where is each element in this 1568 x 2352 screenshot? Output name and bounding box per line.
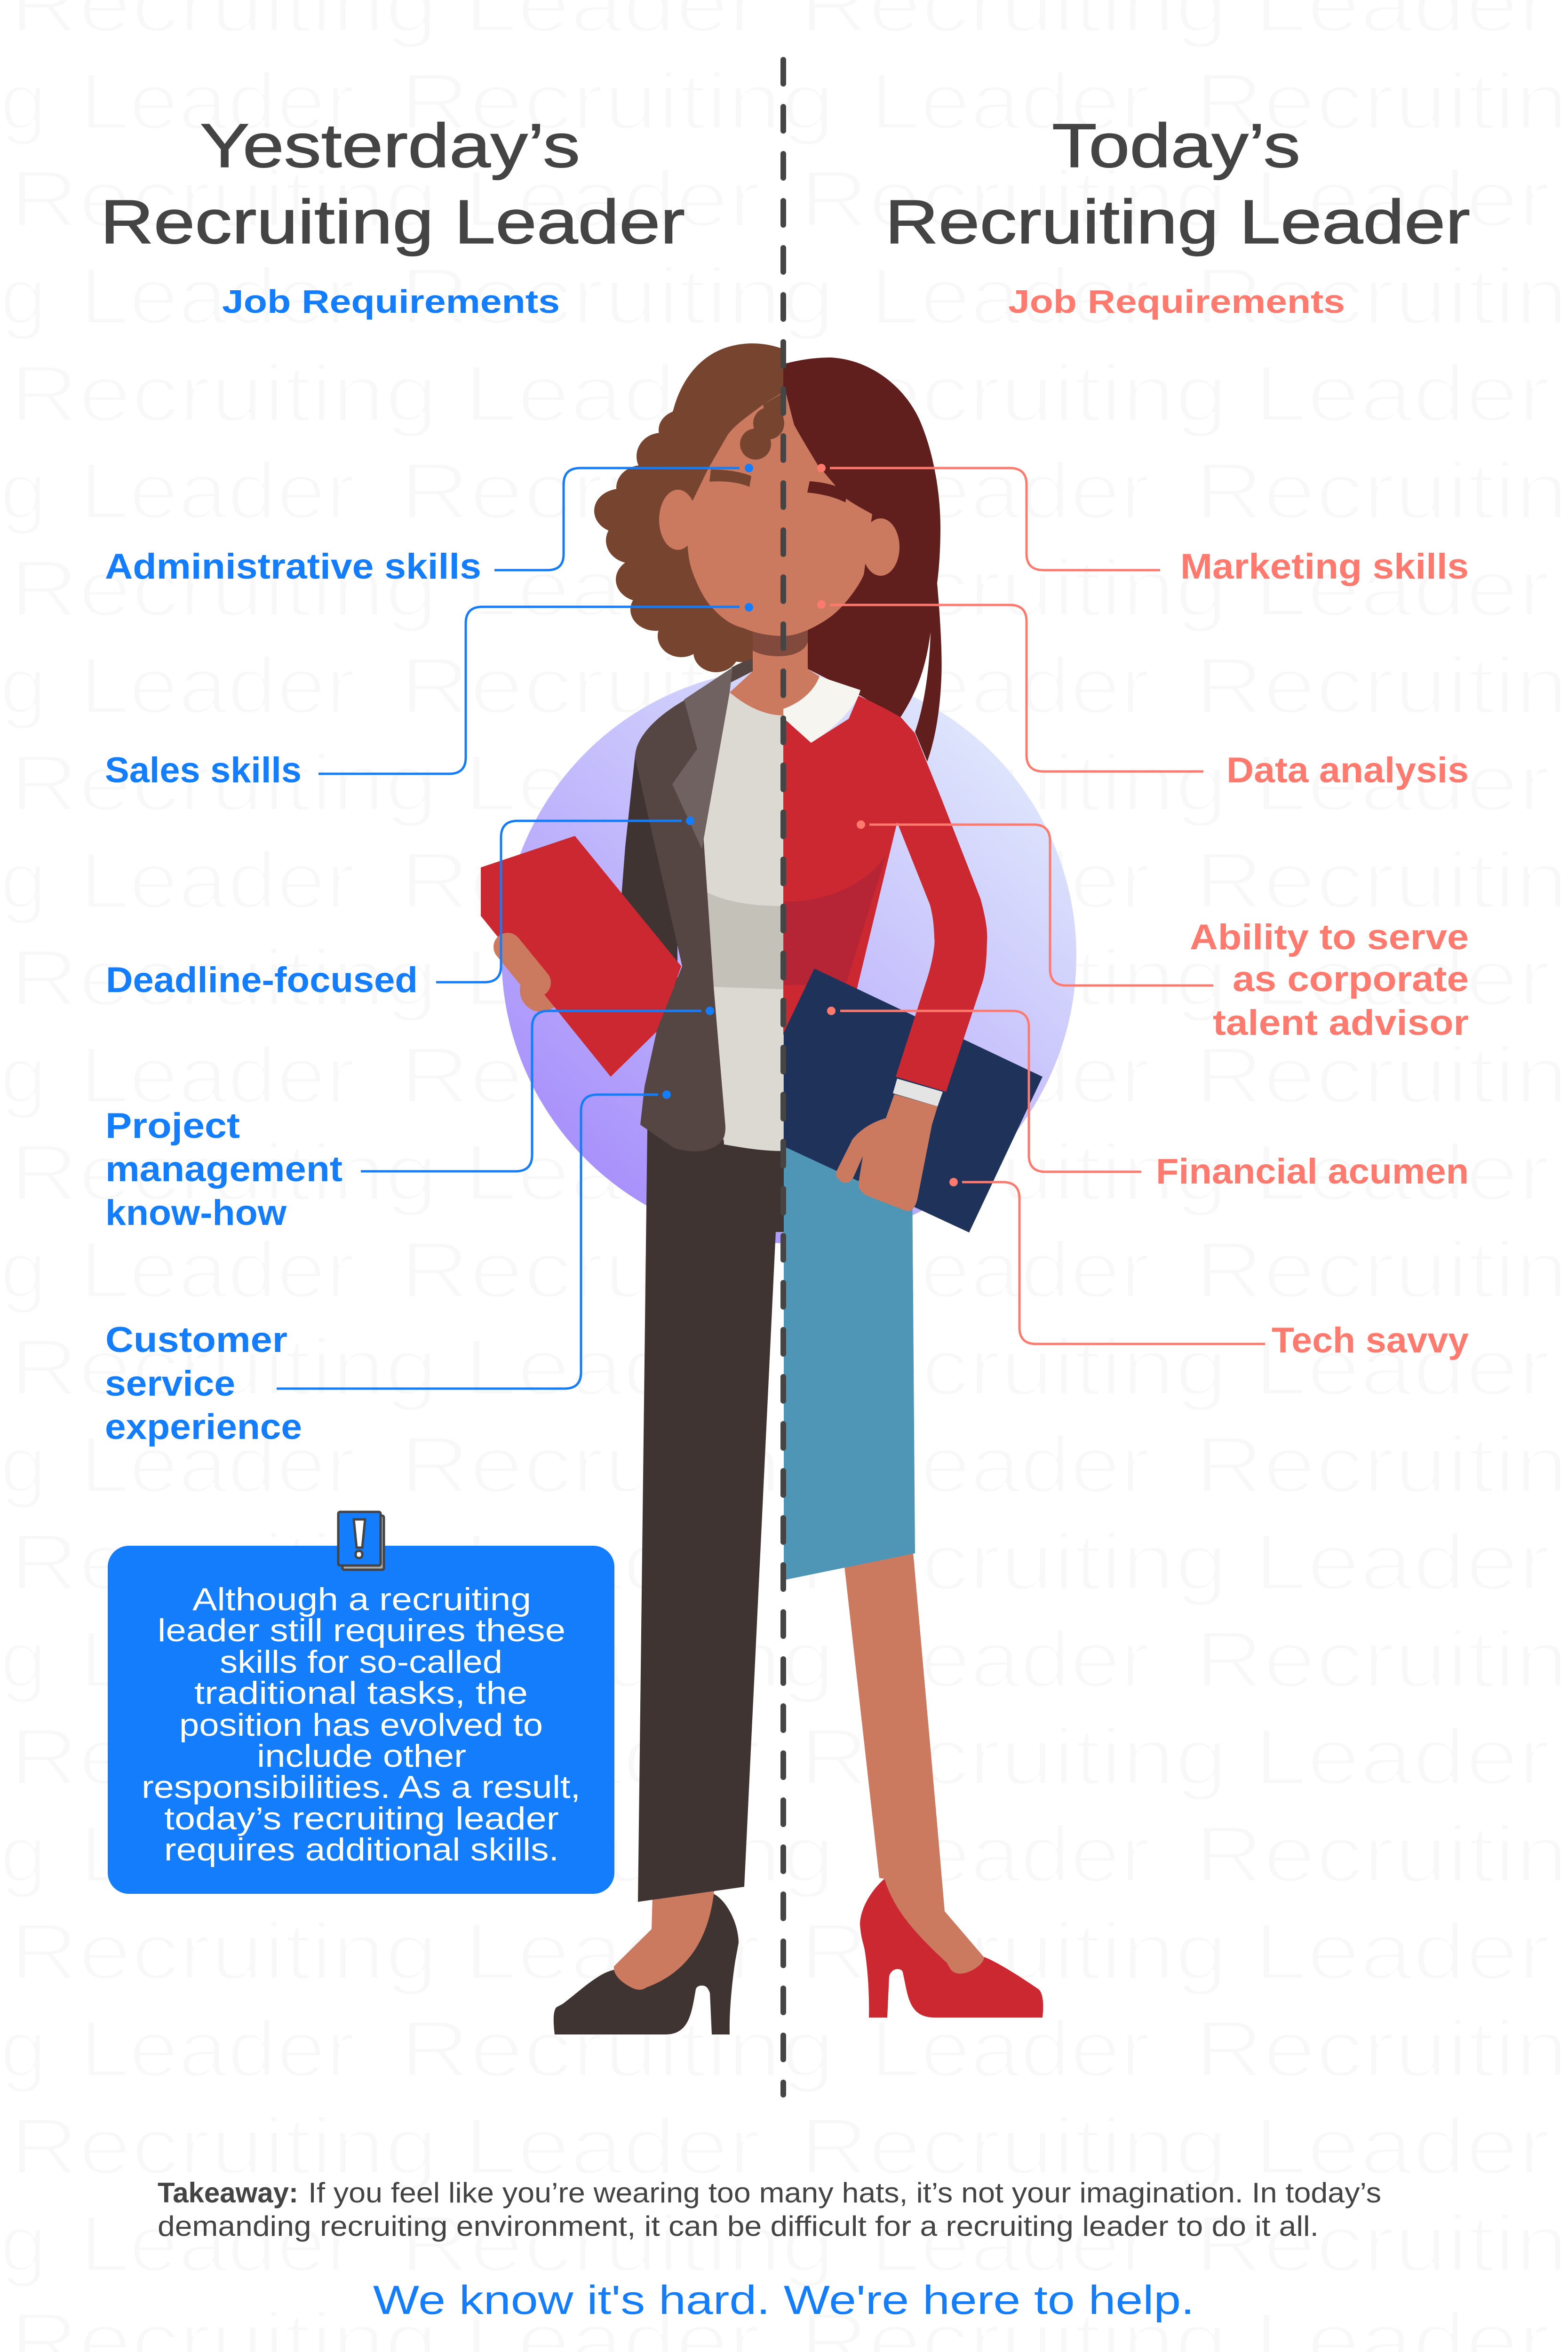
background watermark: repeating Recruiting Leader: Recruiting <box>400 1031 835 1120</box>
background watermark: repeating Recruiting Leader: g <box>0 2199 47 2288</box>
background watermark: repeating Recruiting Leader: Leader <box>80 1031 355 1120</box>
connector: Data analysis <box>817 600 1203 771</box>
label: Ability to serve as corporate talent advisor: talent advisor <box>1213 1003 1469 1043</box>
right hand <box>836 1094 938 1211</box>
jacket <box>635 682 725 1152</box>
background watermark: repeating Recruiting Leader: Leader <box>80 2004 355 2094</box>
left leg <box>614 1886 715 1990</box>
background watermark: repeating Recruiting Leader: Leader <box>80 1810 355 1899</box>
heading: Yesterday's Recruiting Leader: Yesterday’s <box>200 111 580 180</box>
callout text: Although a recruiting <box>192 1581 531 1617</box>
background watermark: repeating Recruiting Leader: g <box>0 446 47 536</box>
connector: Deadline-focused <box>436 817 694 982</box>
background watermark: repeating Recruiting Leader: Recruiting Leader <box>10 1907 760 1996</box>
background watermark: repeating Recruiting Leader: g <box>0 1810 47 1899</box>
label: Customer service experience: Customer <box>105 1320 287 1360</box>
left ear <box>659 490 697 550</box>
neck shadow <box>753 630 808 656</box>
background watermark: repeating Recruiting Leader: Recruitin <box>1195 446 1568 536</box>
label: Financial acumen: Financial acumen <box>1156 1152 1469 1192</box>
callout text: responsibilities. As a result, <box>142 1769 581 1805</box>
background watermark: repeating Recruiting Leader: Recruiting Leader <box>10 1128 760 1217</box>
background watermark: repeating Recruiting Leader: Recruiting Leader <box>10 349 760 438</box>
background watermark: repeating Recruiting Leader: Recruiting Leader <box>800 1323 1550 1412</box>
callout text: skills for so-called <box>220 1644 502 1680</box>
background watermark: repeating Recruiting Leader: Recruitin <box>1195 1420 1568 1510</box>
background watermark: repeating Recruiting Leader: Recruitin <box>1195 57 1568 146</box>
heading: Today's Recruiting Leader: Today’s <box>1052 111 1300 180</box>
background watermark: repeating Recruiting Leader: Recruiting Leader <box>800 544 1550 633</box>
background watermark: repeating Recruiting Leader: Leader <box>870 1615 1150 1704</box>
label: Data analysis: Data analysis <box>1226 750 1469 790</box>
callout text: requires additional skills. <box>164 1832 559 1867</box>
forehead curls <box>740 393 784 460</box>
label: Project management know-how <box>105 1106 342 1233</box>
background watermark: repeating Recruiting Leader: g <box>0 57 47 146</box>
background watermark: repeating Recruiting Leader: Recruiting <box>400 252 835 341</box>
takeaway text: Takeaway: <box>158 2177 298 2209</box>
left eyebrow <box>709 469 751 487</box>
connector: Marketing skills <box>817 464 1160 570</box>
jacket lapel <box>672 667 732 849</box>
trousers <box>638 1129 784 1902</box>
background watermark: repeating Recruiting Leader: Recruitin <box>1195 2199 1568 2288</box>
background watermark: repeating Recruiting Leader: g <box>0 1225 47 1315</box>
background watermark: repeating Recruiting Leader: Recruiting Leader <box>10 1712 760 1802</box>
background watermark: repeating Recruiting Leader: Leader <box>80 1615 355 1704</box>
skirt <box>784 1129 915 1580</box>
background watermark: repeating Recruiting Leader: Recruiting <box>400 2199 835 2288</box>
left shoe <box>554 1894 739 2034</box>
background circle <box>501 668 1076 1243</box>
takeaway text: demanding recruiting environment, it can be difficult for a recruiting leader to do it all. <box>158 2210 1319 2242</box>
sweater torso <box>783 696 936 1035</box>
background watermark: repeating Recruiting Leader: Recruitin <box>1195 836 1568 925</box>
background watermark: repeating Recruiting Leader: g <box>0 1615 47 1704</box>
background watermark: repeating Recruiting Leader: Leader <box>80 1225 355 1315</box>
background watermark: repeating Recruiting Leader: Leader <box>870 446 1150 536</box>
takeaway text <box>158 2177 1381 2242</box>
background watermark: repeating Recruiting Leader: g <box>0 1420 47 1510</box>
label: Project management know-how: Project <box>105 1106 240 1146</box>
background watermark: repeating Recruiting Leader: Recruitin <box>1195 1225 1568 1315</box>
jacket inner shadow <box>616 755 677 988</box>
background watermark: repeating Recruiting Leader: Leader <box>80 57 355 146</box>
background watermark: repeating Recruiting Leader: Recruiting <box>400 641 835 731</box>
background watermark: repeating Recruiting Leader: Recruiting Leader <box>10 544 760 633</box>
background watermark: repeating Recruiting Leader: Recruiting Leader <box>10 739 760 828</box>
background watermark: repeating Recruiting Leader: Recruiting <box>400 1615 835 1704</box>
right ear <box>862 518 899 576</box>
illustration: split figure of recruiting leader <box>481 343 1043 2034</box>
background watermark: repeating Recruiting Leader: Leader <box>80 446 355 536</box>
call to action: We know it's hard. We're here to help. <box>373 2278 1194 2323</box>
blue folder <box>784 969 1043 1232</box>
left hair <box>594 343 783 672</box>
left hand finger <box>508 947 537 983</box>
callout text: today’s recruiting leader <box>164 1801 559 1836</box>
background watermark: repeating Recruiting Leader: Recruiting <box>400 57 835 146</box>
background watermark: repeating Recruiting Leader: Leader <box>870 252 1150 341</box>
jacket back collar <box>730 659 753 683</box>
background watermark: repeating Recruiting Leader: Leader <box>870 641 1150 731</box>
neck and chest <box>730 626 820 715</box>
background watermark: repeating Recruiting Leader: Leader <box>80 641 355 731</box>
background watermark: repeating Recruiting Leader: Leader <box>870 2004 1150 2094</box>
background watermark: repeating Recruiting Leader: Leader <box>80 2199 355 2288</box>
sweater arm <box>896 733 987 1092</box>
sweater collar <box>783 676 860 743</box>
callout text <box>142 1581 581 1867</box>
sweater cuff <box>893 1079 943 1106</box>
top shadow band <box>704 890 783 989</box>
background watermark: repeating Recruiting Leader: Recruiting Leader <box>800 2102 1550 2191</box>
subheading: right job requirements: Job Requirements <box>1008 283 1345 320</box>
background watermark: repeating Recruiting Leader: Recruitin <box>1195 641 1568 731</box>
heading: Today's Recruiting Leader <box>885 111 1470 256</box>
label: Sales skills: Sales skills <box>105 750 302 790</box>
label: Ability to serve as corporate talent advisor: Ability to serve <box>1190 917 1469 957</box>
background watermark: repeating Recruiting Leader: Recruiting <box>400 1810 835 1899</box>
label: Administrative skills: Administrative skills <box>105 547 481 587</box>
background watermark: repeating Recruiting Leader: Leader <box>80 252 355 341</box>
background watermark: repeating Recruiting Leader: Leader <box>80 1420 355 1510</box>
heading: Today's Recruiting Leader: Recruiting Leader <box>885 187 1470 256</box>
sweater shadow <box>784 856 886 985</box>
background watermark: repeating Recruiting Leader: Recruiting Leader <box>10 154 760 244</box>
label: Project management know-how: management <box>105 1149 342 1189</box>
label: Tech savvy: Tech savvy <box>1272 1320 1469 1360</box>
background watermark: repeating Recruiting Leader: Recruiting Leader <box>800 349 1550 438</box>
label: Deadline-focused: Deadline-focused <box>106 960 418 1000</box>
background watermark: repeating Recruiting Leader: Leader <box>870 1225 1150 1315</box>
background watermark: repeating Recruiting Leader: g <box>0 252 47 341</box>
background watermark: repeating Recruiting Leader: Recruiting Leader <box>800 1128 1550 1217</box>
icon: exclamation note <box>338 1512 384 1570</box>
background watermark: repeating Recruiting Leader: g <box>0 2004 47 2094</box>
centre dashed divider <box>780 60 786 2095</box>
background watermark: repeating Recruiting Leader: Leader <box>870 1810 1150 1899</box>
background watermark: repeating Recruiting Leader: Recruiting <box>400 446 835 536</box>
label: Ability to serve as corporate talent advisor <box>1190 917 1469 1043</box>
background watermark: repeating Recruiting Leader: Recruiting Leader <box>800 933 1550 1023</box>
background watermark: repeating Recruiting Leader: Leader <box>870 1420 1150 1510</box>
red folder <box>481 836 681 1077</box>
background watermark: repeating Recruiting Leader: Recruiting Leader <box>800 1712 1550 1802</box>
background watermark: repeating Recruiting Leader: Leader <box>80 836 355 925</box>
callout text: traditional tasks, the <box>194 1675 528 1711</box>
background watermark: repeating Recruiting Leader: g <box>0 836 47 925</box>
background watermark: repeating Recruiting Leader: Recruiting Leader <box>10 1518 760 1607</box>
background watermark: repeating Recruiting Leader: Recruiting Leader <box>800 154 1550 244</box>
subheading: left job requirements: Job Requirements <box>222 283 560 320</box>
label: Project management know-how: know-how <box>105 1193 287 1233</box>
background watermark: repeating Recruiting Leader: Recruiting Leader <box>10 933 760 1023</box>
connector: Financial acumen <box>827 1007 1141 1172</box>
background watermark: repeating Recruiting Leader: g <box>0 641 47 731</box>
background watermark: repeating Recruiting Leader: Recruiting Leader <box>10 2102 760 2191</box>
right shoe <box>860 1879 1043 2018</box>
label: Customer service experience <box>105 1320 302 1447</box>
connector: Sales skills <box>318 603 753 774</box>
background watermark: repeating Recruiting Leader: Recruiting Leader <box>10 1323 760 1412</box>
background watermark: repeating Recruiting Leader: Recruiting Leader <box>800 1907 1550 1996</box>
white top <box>701 692 783 1151</box>
label: Customer service experience: service <box>105 1364 235 1404</box>
background watermark: repeating Recruiting Leader: Leader <box>870 1031 1150 1120</box>
takeaway text: If you feel like you’re wearing too many hats, it’s not your imagination. In today’s <box>308 2177 1381 2209</box>
heading: Yesterday's Recruiting Leader: Recruiting Leader <box>100 187 685 256</box>
connector: Customer service experience <box>277 1090 671 1389</box>
background watermark: repeating Recruiting Leader: Recruiting <box>400 2004 835 2094</box>
face <box>688 392 872 636</box>
background watermark: repeating Recruiting Leader: Recruiting Leader <box>800 739 1550 828</box>
label: Customer service experience: experience <box>105 1407 302 1447</box>
background watermark: repeating Recruiting Leader: Recruiting <box>400 1225 835 1315</box>
connector: Project management know-how <box>361 1007 714 1171</box>
right eyebrow <box>807 481 848 502</box>
background watermark: repeating Recruiting Leader: Recruiting Leader <box>800 1518 1550 1607</box>
background watermark: repeating Recruiting Leader: Recruiting <box>400 836 835 925</box>
background watermark: repeating Recruiting Leader: Recruitin <box>1195 1031 1568 1120</box>
heading: Yesterday's Recruiting Leader <box>100 111 685 256</box>
callout panel <box>108 1512 614 1894</box>
background watermark: repeating Recruiting Leader: Recruitin <box>1195 1615 1568 1704</box>
background watermark: repeating Recruiting Leader: g <box>0 1031 47 1120</box>
label: Marketing skills: Marketing skills <box>1180 547 1469 587</box>
callout text: position has evolved to <box>179 1707 543 1743</box>
callout text: leader still requires these <box>158 1613 565 1648</box>
background watermark: repeating Recruiting Leader: Recruitin <box>1195 1810 1568 1899</box>
connector: Administrative skills <box>494 464 753 570</box>
background watermark: repeating Recruiting Leader: Recruitin <box>1195 252 1568 341</box>
right hair <box>783 358 942 762</box>
background watermark: repeating Recruiting Leader: Leader <box>870 2199 1150 2288</box>
background watermark: repeating Recruiting Leader: Leader <box>870 57 1150 146</box>
callout background <box>108 1546 614 1894</box>
background watermark: repeating Recruiting Leader: Recruiting <box>400 1420 835 1510</box>
connector: Tech savvy <box>949 1178 1265 1344</box>
label: Ability to serve as corporate talent advisor: as corporate <box>1233 959 1469 999</box>
connector: Ability to serve as corporate talent advisor <box>857 820 1213 985</box>
left hand palm <box>520 969 562 1012</box>
background watermark: repeating Recruiting Leader: Leader <box>870 836 1150 925</box>
right leg <box>844 1552 984 1974</box>
callout text: include other <box>257 1738 466 1774</box>
background watermark: repeating Recruiting Leader: Recruitin <box>1195 2004 1568 2094</box>
